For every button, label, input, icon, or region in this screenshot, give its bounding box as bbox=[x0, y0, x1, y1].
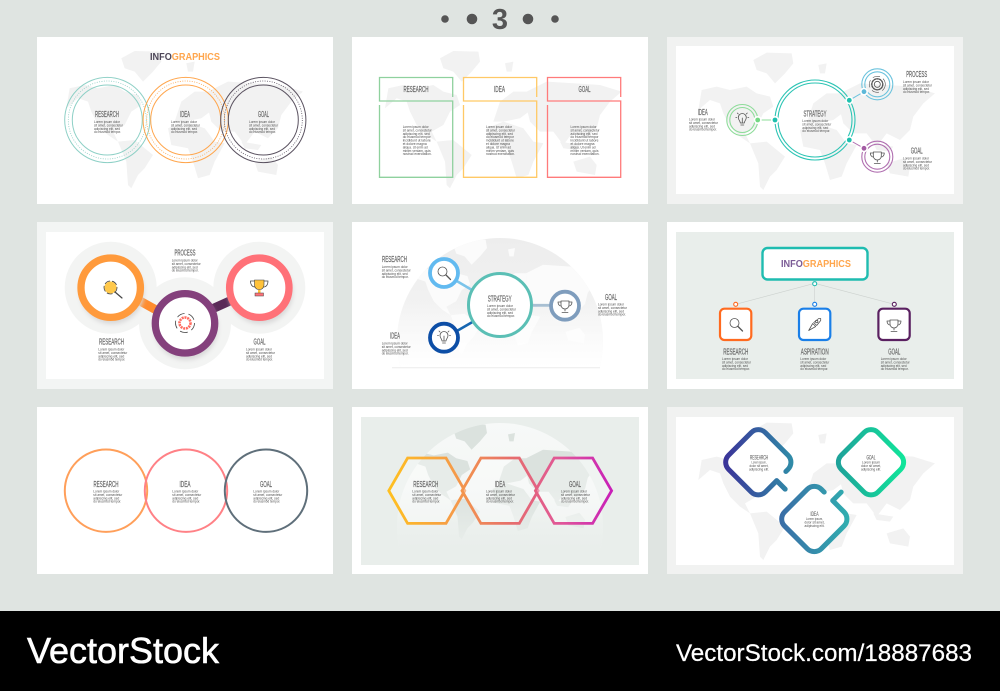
text: research: sit amet, consectetur bbox=[722, 360, 752, 364]
text: idea bbox=[382, 332, 411, 356]
text: strategy bbox=[487, 294, 517, 318]
text: research: RESEARCH bbox=[99, 338, 124, 346]
text: research: RESEARCH bbox=[723, 348, 748, 356]
text: research: RESEARCH bbox=[750, 456, 768, 462]
icon: bulb bbox=[736, 113, 749, 125]
connector: goal bbox=[533, 304, 551, 307]
text: idea: adipiscing elit, sed bbox=[172, 496, 198, 500]
text: goal: GOAL bbox=[911, 146, 923, 156]
text: research: sit amet, consectetur bbox=[98, 351, 128, 355]
text: goal bbox=[861, 456, 881, 471]
text: research: adipiscing elit. bbox=[749, 467, 769, 471]
panel: globe strategy hub bbox=[352, 222, 648, 389]
icon: bulb bbox=[438, 331, 450, 343]
text: research: do eiusmod tempor. bbox=[412, 500, 440, 504]
text: strategy: sit amet, consectetur bbox=[802, 122, 832, 126]
circle: idea bbox=[143, 77, 228, 163]
diamond: idea bbox=[778, 474, 860, 556]
connector: idea bbox=[457, 322, 472, 331]
text: research: adipiscing elit, sed bbox=[98, 354, 124, 358]
ground line bbox=[392, 367, 600, 369]
text: idea: IDEA bbox=[495, 480, 506, 489]
text: idea: sit amet, consectetur bbox=[689, 121, 719, 125]
text: idea: Lorem ipsum dolor bbox=[486, 490, 513, 494]
icon: magnifier bbox=[438, 267, 450, 280]
globe bbox=[418, 423, 590, 514]
text: idea: Lorem ipsum dolor bbox=[171, 120, 198, 124]
title box bbox=[762, 248, 868, 280]
text: idea bbox=[486, 85, 516, 156]
text: process bbox=[903, 70, 933, 94]
text: research: sit amet, consectetur bbox=[382, 268, 411, 272]
text: strategy: sit amet, consectetur bbox=[487, 307, 517, 311]
box: research bbox=[380, 78, 453, 177]
text: research bbox=[93, 480, 123, 504]
panel: interlaced hexagons bbox=[352, 407, 648, 574]
text: goal: adipiscing elit, sed bbox=[249, 127, 275, 131]
ring shadows bbox=[80, 260, 293, 360]
text: research: Lorem ipsum dolor bbox=[403, 125, 429, 129]
panel: three plain circles bbox=[37, 407, 333, 574]
ring: goal bbox=[230, 258, 289, 317]
title box: INFOGRAPHICS bbox=[781, 258, 851, 270]
text: goal: sit amet, consectetur bbox=[253, 493, 283, 497]
text: goal: Lorem ipsum dolor bbox=[881, 357, 907, 361]
text: goal: sit amet, consectetur bbox=[249, 123, 279, 127]
text: goal: do eiusmod tempor. bbox=[253, 500, 280, 504]
text: research bbox=[403, 85, 432, 156]
text: idea: sit amet, consectetur bbox=[486, 128, 516, 132]
text: goal: aliqua. Ut enim ad bbox=[570, 145, 596, 149]
text: goal: incididunt ut labore bbox=[570, 139, 599, 143]
box: idea bbox=[464, 78, 537, 177]
circle: strategy bbox=[468, 274, 532, 336]
text: research: RESEARCH bbox=[94, 480, 119, 489]
brand name: VectorStock bbox=[27, 630, 220, 671]
text: goal: minim veniam, quis bbox=[570, 149, 599, 153]
connector nodes bbox=[754, 88, 868, 152]
text: goal bbox=[561, 480, 591, 504]
circle: process bbox=[862, 69, 893, 100]
box: goal bbox=[548, 78, 621, 177]
circle: idea bbox=[430, 324, 458, 352]
icon: trophy bbox=[558, 301, 572, 312]
text: process: PROCESS bbox=[906, 70, 927, 79]
text: process: Lorem ipsum dolor bbox=[172, 258, 198, 262]
text: goal: adipiscing elit, sed bbox=[570, 132, 598, 136]
footer bar bbox=[0, 611, 1000, 691]
text: idea: sit amet, consectetur bbox=[172, 493, 202, 497]
text: research: Lorem ipsum dolor bbox=[93, 490, 120, 494]
text: goal: GOAL bbox=[866, 456, 876, 462]
text: goal: GOAL bbox=[260, 480, 272, 489]
text: goal: do eiusmod tempor. bbox=[903, 167, 930, 171]
title: infographics: INFOGRAPHICS bbox=[150, 51, 220, 63]
text: idea: Lorem ipsum dolor bbox=[486, 125, 513, 129]
text: idea: do eiusmod tempor. bbox=[171, 130, 198, 134]
text: idea: adipiscing elit, sed bbox=[486, 132, 513, 136]
text: research: do eiusmod tempor bbox=[403, 135, 431, 139]
text: research: dolor sit amet, bbox=[750, 464, 769, 468]
panel: org chart bbox=[667, 222, 963, 389]
text: process: adipiscing elit, sed bbox=[903, 87, 929, 91]
text: research: RESEARCH bbox=[382, 255, 407, 264]
text: idea bbox=[804, 512, 825, 528]
connector: orange bbox=[140, 301, 158, 311]
text: goal: sit amet, consectetur bbox=[246, 351, 276, 355]
text: idea bbox=[486, 480, 516, 504]
panel: three dotted circles bbox=[37, 37, 333, 204]
circle: goal bbox=[862, 141, 893, 172]
text: goal: Lorem ipsum dolor bbox=[903, 156, 930, 160]
text: goal: do eiusmod tempor. bbox=[246, 358, 273, 362]
text: process: PROCESS bbox=[174, 248, 196, 258]
tree lines bbox=[736, 283, 894, 304]
text: research bbox=[382, 255, 411, 279]
text: idea: adipiscing elit. bbox=[804, 524, 825, 528]
diamond: research bbox=[722, 426, 804, 508]
text: research: do eiusmod tempor. bbox=[94, 130, 121, 134]
text: research: nostrud exercitation. bbox=[403, 152, 432, 156]
text: goal: GOAL bbox=[888, 348, 901, 356]
text: goal: adipiscing elit, sed bbox=[246, 354, 272, 358]
text: process: sit amet, consectetur bbox=[903, 83, 933, 87]
text: idea: IDEA bbox=[180, 480, 191, 489]
text: idea: sit amet, consectetur bbox=[486, 493, 516, 497]
diamond: goal bbox=[834, 426, 908, 499]
text: research: minim veniam, quis bbox=[403, 149, 431, 153]
text: goal: Lorem ipsum dolor bbox=[561, 490, 588, 494]
text: research: do eiusmod tempor. bbox=[382, 275, 409, 279]
box: aspiration bbox=[799, 302, 830, 340]
box: goal bbox=[878, 302, 910, 340]
text: research: et dolore magna bbox=[403, 142, 427, 146]
text: research: Lorem ipsum dolor bbox=[722, 357, 749, 361]
text: research: Lorem ipsum dolor bbox=[94, 120, 121, 124]
text: goal: GOAL bbox=[605, 293, 617, 302]
text: strategy: STRATEGY bbox=[488, 294, 512, 304]
text: idea: adipiscing elit, sed bbox=[382, 348, 408, 352]
text: idea: Lorem ipsum dolor bbox=[382, 342, 408, 346]
text: goal: adipiscing elit, sed bbox=[903, 163, 929, 167]
text: idea: do eiusmod tempor bbox=[486, 135, 515, 139]
text: idea bbox=[689, 108, 719, 132]
text: goal bbox=[246, 338, 276, 362]
text: idea: adipiscing elit, sed bbox=[171, 127, 197, 131]
text: strategy bbox=[802, 110, 832, 133]
text: aspiration: adipiscing elit, sed bbox=[800, 364, 826, 368]
text: aspiration bbox=[800, 348, 830, 371]
text: strategy: adipiscing elit, sed bbox=[802, 126, 828, 130]
text: goal bbox=[253, 480, 283, 504]
ring: research bbox=[81, 258, 140, 317]
text: idea: incididunt ut labore bbox=[486, 139, 514, 143]
text: goal: Lorem ipsum dolor bbox=[598, 302, 625, 306]
panel: rounded diamonds bbox=[667, 407, 963, 574]
text: research: sit amet, consectetur bbox=[412, 493, 442, 497]
icon: gear bbox=[869, 76, 885, 92]
text: aspiration: sit amet, consectetur bbox=[800, 360, 830, 364]
text: idea: Lorem ipsum, bbox=[806, 517, 823, 521]
text: goal: GOAL bbox=[258, 110, 269, 119]
text: strategy: adipiscing elit, sed bbox=[487, 311, 513, 315]
text: goal bbox=[598, 293, 628, 317]
text: goal: sit amet, consectetur bbox=[881, 360, 910, 364]
text: goal: sit amet, consectetur bbox=[903, 160, 933, 164]
circle: research bbox=[65, 77, 150, 163]
icon: trophy bbox=[870, 152, 884, 164]
text: process: sit amet, consectetur bbox=[172, 262, 201, 266]
text: idea: sit amet, consectetur bbox=[382, 345, 411, 349]
text: strategy: STRATEGY bbox=[804, 110, 827, 118]
text: idea: IDEA bbox=[494, 85, 505, 94]
circle: strategy bbox=[775, 80, 855, 160]
text: idea: IDEA bbox=[390, 332, 400, 340]
text: idea: adipiscing elit, sed bbox=[689, 124, 715, 128]
text: process: do eiusmod tempor. bbox=[903, 90, 930, 94]
text: goal: Lorem ipsum dolor bbox=[570, 125, 597, 129]
text: goal: do eiusmod tempor. bbox=[881, 367, 909, 371]
text: process bbox=[172, 248, 201, 273]
icon: trophy bbox=[250, 280, 268, 296]
text: goal: do eiusmod tempor bbox=[570, 135, 599, 139]
circle: goal bbox=[221, 77, 306, 163]
circle: goal bbox=[551, 292, 579, 320]
text: idea: sit amet, consectetur bbox=[171, 123, 201, 127]
text: goal: adipiscing elit, sed bbox=[881, 364, 907, 368]
text: research: adipiscing elit, sed bbox=[722, 364, 748, 368]
image url: VectorStock.com/18887683 bbox=[676, 640, 972, 667]
text: goal: GOAL bbox=[254, 338, 266, 346]
text: research: adipiscing elit, sed bbox=[94, 127, 120, 131]
text: process: Lorem ipsum dolor bbox=[903, 80, 930, 84]
hexagon: research bbox=[389, 458, 465, 523]
text: goal: nostrud exercitation. bbox=[570, 152, 600, 156]
circle: research bbox=[65, 450, 147, 532]
text: research: Lorem ipsum dolor bbox=[382, 265, 408, 269]
text: research: adipiscing elit, sed bbox=[93, 496, 119, 500]
text: goal: Lorem ipsum dolor bbox=[249, 120, 276, 124]
text: aspiration: do eiusmod tempor. bbox=[800, 367, 828, 371]
connector: research bbox=[457, 281, 472, 290]
text: idea: et dolore magna bbox=[486, 142, 510, 146]
text: research bbox=[412, 480, 442, 504]
panel: bold rings chain bbox=[37, 222, 333, 389]
text: goal: dolor sit amet, bbox=[861, 464, 881, 468]
text: goal: sit amet, consectetur bbox=[561, 493, 591, 497]
text: research: Lorem ipsum dolor bbox=[98, 348, 125, 352]
text: idea: nostrud exercitation. bbox=[486, 152, 515, 156]
text: idea: IDEA bbox=[180, 110, 190, 119]
text: goal bbox=[249, 110, 279, 134]
panel: three outlined boxes bbox=[352, 37, 648, 204]
text: research: sit amet, consectetur bbox=[403, 128, 432, 132]
text: research: RESEARCH bbox=[413, 480, 438, 489]
text: idea: Lorem ipsum dolor bbox=[172, 490, 199, 494]
text: research: adipiscing elit, sed bbox=[403, 132, 430, 136]
text: aspiration: ASPIRATION bbox=[801, 348, 829, 356]
text: idea bbox=[172, 480, 202, 504]
text: goal: Lorem ipsum dolor bbox=[253, 490, 280, 494]
text: research: aliqua. Ut enim ad bbox=[403, 145, 428, 149]
text: research bbox=[722, 348, 752, 371]
text: goal: do eiusmod tempor. bbox=[598, 313, 626, 317]
circle: idea bbox=[145, 450, 227, 532]
text: goal: Lorem ipsum dolor bbox=[246, 348, 273, 352]
text: research: do eiusmod tempor. bbox=[93, 500, 121, 504]
text: idea bbox=[171, 110, 201, 134]
text: research: RESEARCH bbox=[95, 110, 119, 119]
text: research: adipiscing elit, sed bbox=[382, 272, 408, 276]
text: goal: adipiscing elit. bbox=[861, 467, 881, 471]
text: strategy: Lorem ipsum dolor bbox=[487, 304, 514, 308]
text: goal: adipiscing elit, sed bbox=[598, 309, 624, 313]
ring: process bbox=[155, 294, 215, 353]
text: idea: do eiusmod tempor. bbox=[486, 500, 514, 504]
text: research: RESEARCH bbox=[404, 85, 429, 94]
text: goal bbox=[881, 348, 910, 371]
text: goal: adipiscing elit, sed bbox=[253, 496, 279, 500]
page number header: 3 bbox=[492, 4, 508, 36]
text: research: sit amet, consectetur bbox=[94, 123, 124, 127]
circle: research bbox=[430, 259, 458, 287]
text: idea: adipiscing elit, sed bbox=[486, 496, 512, 500]
ground shadow bbox=[387, 541, 613, 543]
page number header bbox=[441, 4, 559, 36]
text: research: sit amet, consectetur bbox=[93, 493, 123, 497]
text: research: Lorem ipsum dolor bbox=[412, 490, 439, 494]
text: research: incididunt ut labore bbox=[403, 139, 431, 143]
circle: idea bbox=[727, 104, 758, 136]
text: goal: do eiusmod tempor. bbox=[561, 500, 589, 504]
circle: goal bbox=[225, 450, 307, 532]
text: idea: do eiusmod tempor. bbox=[172, 500, 200, 504]
text: aspiration: Lorem ipsum dolor bbox=[800, 357, 827, 361]
icon: magnifier bbox=[104, 281, 122, 298]
text: goal: Lorem ipsum bbox=[862, 460, 880, 464]
text: goal bbox=[903, 146, 933, 171]
icon: gear bbox=[176, 314, 194, 332]
text: goal bbox=[570, 85, 600, 156]
box: research bbox=[720, 302, 751, 340]
globe bbox=[399, 238, 601, 324]
hexagon: goal bbox=[535, 458, 612, 523]
text: goal: do eiusmod tempor. bbox=[249, 130, 276, 134]
text: research: Lorem ipsum, bbox=[752, 460, 767, 464]
text: goal: adipiscing elit, sed bbox=[561, 496, 587, 500]
text: idea: dolor sit amet, bbox=[804, 520, 825, 524]
text: goal: GOAL bbox=[569, 480, 581, 489]
connector: purple bbox=[212, 300, 232, 309]
text: process: do eiusmod tempor. bbox=[172, 269, 199, 273]
text: idea: do eiusmod tempor. bbox=[689, 128, 717, 132]
text: research: do eiusmod tempor. bbox=[722, 367, 750, 371]
text: goal: sit amet, consectetur bbox=[598, 306, 628, 310]
panel: strategy hub with three satellites bbox=[667, 37, 963, 204]
text: process: adipiscing elit, sed bbox=[172, 265, 198, 269]
text: idea: do eiusmod tempor. bbox=[382, 352, 409, 356]
text: strategy: Lorem ipsum dolor bbox=[802, 119, 829, 123]
text: idea: Lorem ipsum dolor bbox=[689, 118, 716, 122]
top node bbox=[813, 282, 817, 286]
text: idea: IDEA bbox=[698, 108, 708, 117]
text: research bbox=[749, 456, 769, 471]
hexagon: idea bbox=[462, 458, 538, 523]
text: goal: sit amet, consectetur bbox=[570, 128, 600, 132]
text: strategy: do eiusmod tempor. bbox=[802, 129, 830, 133]
connector lines bbox=[758, 92, 864, 148]
text: idea: minim veniam, quis bbox=[486, 149, 514, 153]
text: research bbox=[94, 110, 124, 134]
text: research: do eiusmod tempor. bbox=[98, 358, 125, 362]
text: goal: GOAL bbox=[578, 85, 591, 94]
text: research bbox=[98, 338, 128, 362]
text: idea: IDEA bbox=[810, 512, 818, 518]
text: strategy: do eiusmod tempor. bbox=[487, 314, 515, 318]
text: idea: aliqua. Ut enim ad bbox=[486, 145, 511, 149]
text: goal: et dolore magna bbox=[570, 142, 595, 146]
text: research: adipiscing elit, sed bbox=[412, 496, 438, 500]
halos bbox=[65, 242, 305, 369]
